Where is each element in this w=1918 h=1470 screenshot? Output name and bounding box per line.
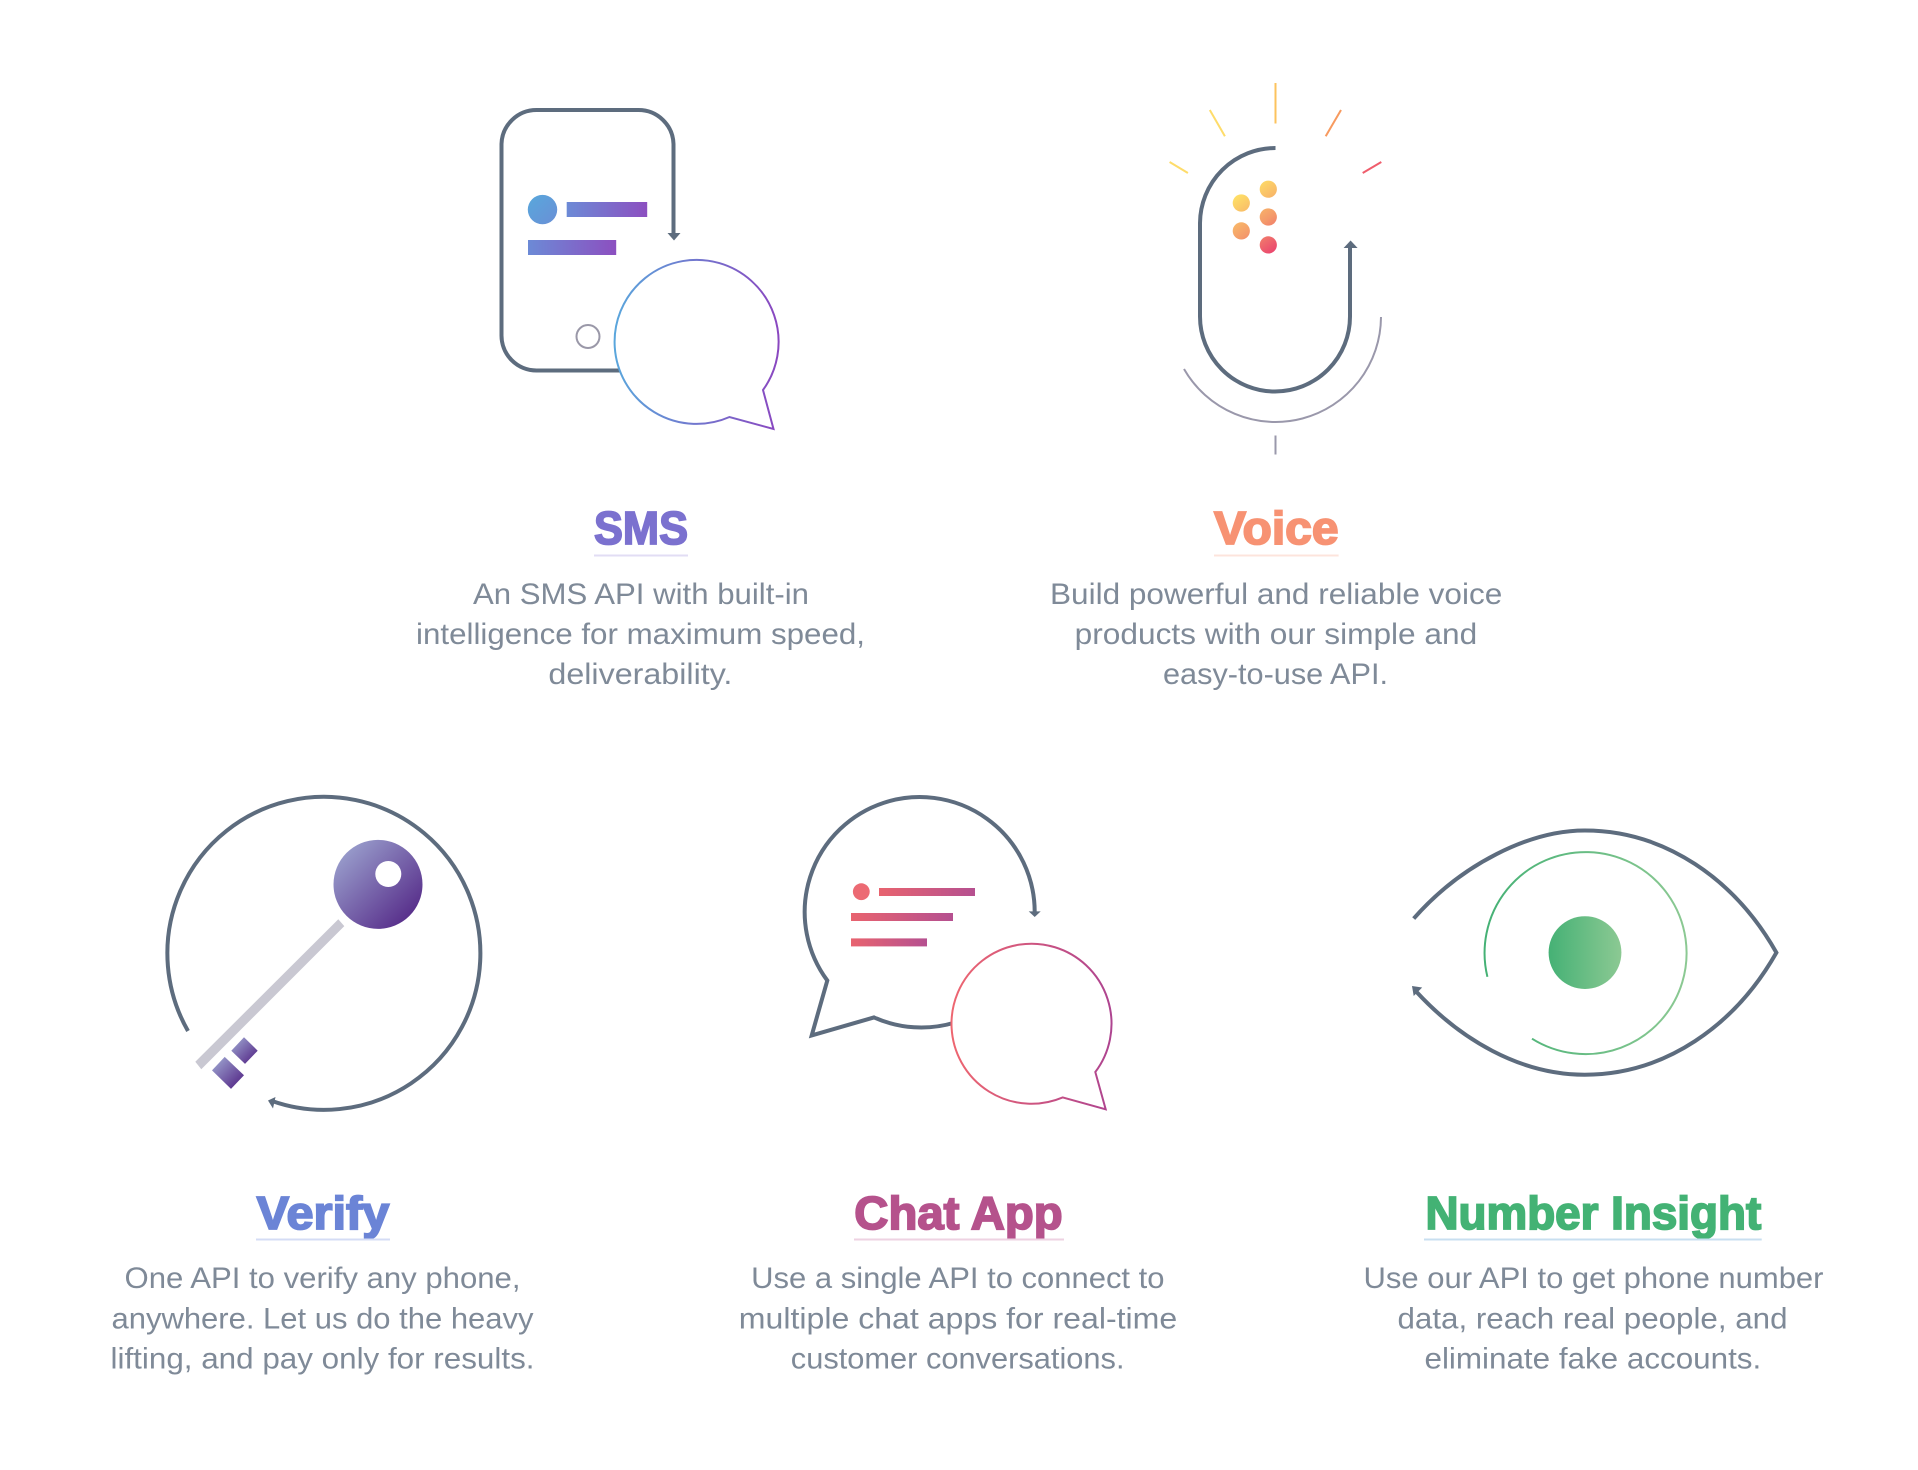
description: [110, 1262, 534, 1376]
message bar one: [567, 202, 647, 217]
heading: Voice: Voice: [1214, 502, 1339, 554]
description: deliverability.: [548, 658, 732, 691]
description: lifting, and pay only for results.: [110, 1342, 534, 1376]
microphone stand arc: [1184, 317, 1381, 422]
message dot: [528, 195, 557, 224]
heading: Number Insight: Number Insight: [1426, 1187, 1761, 1239]
panel: SMS: [416, 110, 865, 691]
large chat bubble with arrow: [805, 797, 1035, 1035]
icon: phone with chat bubble: [501, 110, 779, 429]
description: [739, 1262, 1177, 1376]
sound rays: [1170, 83, 1381, 173]
microphone stand tick: [1274, 436, 1276, 454]
small chat bubble: [951, 944, 1111, 1109]
description: easy-to-use API.: [1163, 658, 1388, 691]
panel: Number Insight: [1364, 830, 1824, 1376]
key tooth upper: [231, 1037, 258, 1064]
description: Build powerful and reliable voice: [1050, 578, 1502, 611]
key tooth lower: [212, 1057, 244, 1089]
chat bubble: [615, 260, 779, 429]
arrow head: [1029, 911, 1041, 917]
heading underline: [1424, 1238, 1762, 1240]
iris arc: [1485, 852, 1687, 1054]
heading underline: [854, 1238, 1064, 1240]
key shaft: [195, 919, 344, 1069]
icon: eye: [1412, 830, 1776, 1075]
description: products with our simple and: [1075, 618, 1477, 651]
description: [1364, 1262, 1824, 1376]
panel: Verify: [110, 797, 534, 1376]
heading: SMS: SMS: [594, 502, 688, 554]
description: anywhere. Let us do the heavy: [112, 1302, 534, 1336]
description: customer conversations.: [791, 1342, 1124, 1376]
microphone body with arrow: [1200, 148, 1350, 392]
description: An SMS API with built-in: [473, 578, 809, 611]
panel: Voice: [1050, 83, 1502, 691]
message bar one: [879, 888, 975, 896]
description: [1050, 578, 1502, 691]
key hole: [375, 861, 401, 887]
description: Use a single API to connect to: [751, 1262, 1164, 1295]
heading: Verify: Verify: [257, 1187, 390, 1239]
panel: Chat App: [739, 797, 1177, 1376]
heading underline: [1214, 554, 1339, 556]
message dot: [853, 883, 870, 900]
arrow head: [1344, 240, 1358, 248]
description: eliminate fake accounts.: [1424, 1342, 1761, 1376]
description: multiple chat apps for real-time: [739, 1302, 1177, 1336]
description: Use our API to get phone number: [1364, 1262, 1824, 1295]
description: [416, 578, 865, 691]
arrow head: [1412, 986, 1422, 996]
icon: key in circle: [167, 797, 480, 1110]
description: One API to verify any phone,: [124, 1262, 520, 1295]
description: data, reach real people, and: [1398, 1302, 1788, 1336]
description: intelligence for maximum speed,: [416, 618, 865, 651]
eye outline with arrow: [1414, 830, 1776, 1075]
icon: chat bubbles: [805, 797, 1111, 1109]
message bar three: [851, 938, 927, 946]
heading: Chat App: Chat App: [854, 1187, 1063, 1239]
pupil: [1549, 916, 1621, 989]
phone home button: [576, 325, 600, 348]
arrow head: [668, 233, 680, 240]
message bar two: [528, 240, 616, 255]
icon: microphone: [1170, 83, 1381, 454]
phone outline with arrow: [501, 110, 674, 370]
microphone dots: [1233, 181, 1277, 253]
key head: [334, 840, 422, 929]
heading underline: [594, 554, 688, 556]
arrow head: [268, 1097, 276, 1108]
circular arrow: [167, 797, 480, 1110]
heading underline: [256, 1238, 390, 1240]
message bar two: [851, 913, 953, 921]
